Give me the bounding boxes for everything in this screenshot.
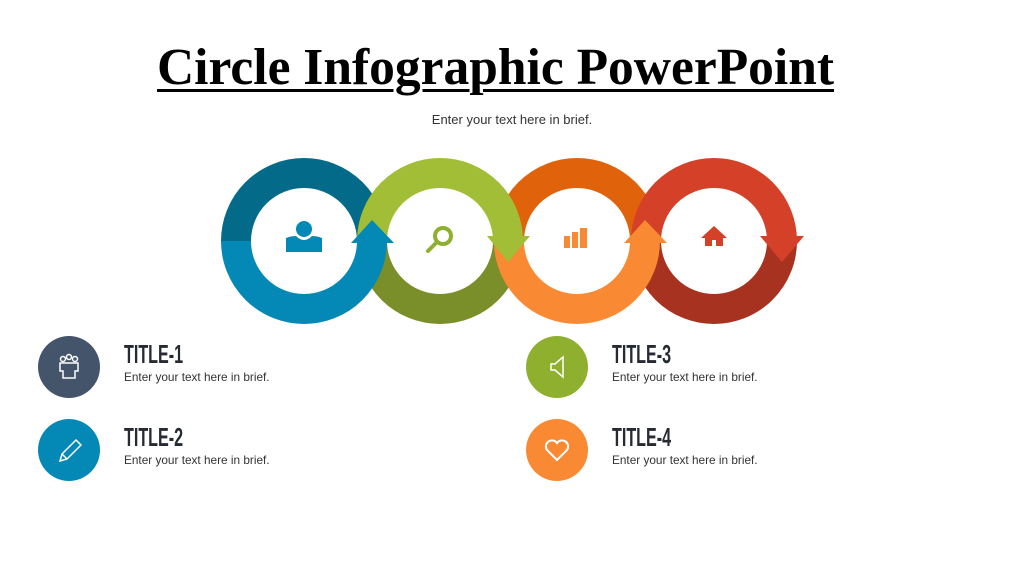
icon: house <box>701 226 727 246</box>
subtitle: Enter your text here in brief. <box>432 112 592 127</box>
icon: magnifier <box>428 228 451 251</box>
item: title-2 <box>38 419 270 481</box>
item: title-3: Enter your text here in brief. <box>612 370 758 384</box>
item: title-4: TITLE-4 <box>612 422 671 452</box>
item: title-1 <box>38 336 270 398</box>
item: title-4: Enter your text here in brief. <box>612 453 758 467</box>
item: title-1: TITLE-1 <box>124 339 183 369</box>
item: title-2: Enter your text here in brief. <box>124 453 270 467</box>
title: Circle Infographic PowerPoint <box>157 39 834 96</box>
icon: bar chart <box>564 228 587 248</box>
item: title-2: TITLE-2 <box>124 422 183 452</box>
icon: person <box>286 221 322 252</box>
arrows <box>351 220 804 262</box>
item: title-3: TITLE-3 <box>612 339 671 369</box>
item: title-4 <box>526 419 758 481</box>
item: title-1: Enter your text here in brief. <box>124 370 270 384</box>
item: title-3 <box>526 336 758 398</box>
